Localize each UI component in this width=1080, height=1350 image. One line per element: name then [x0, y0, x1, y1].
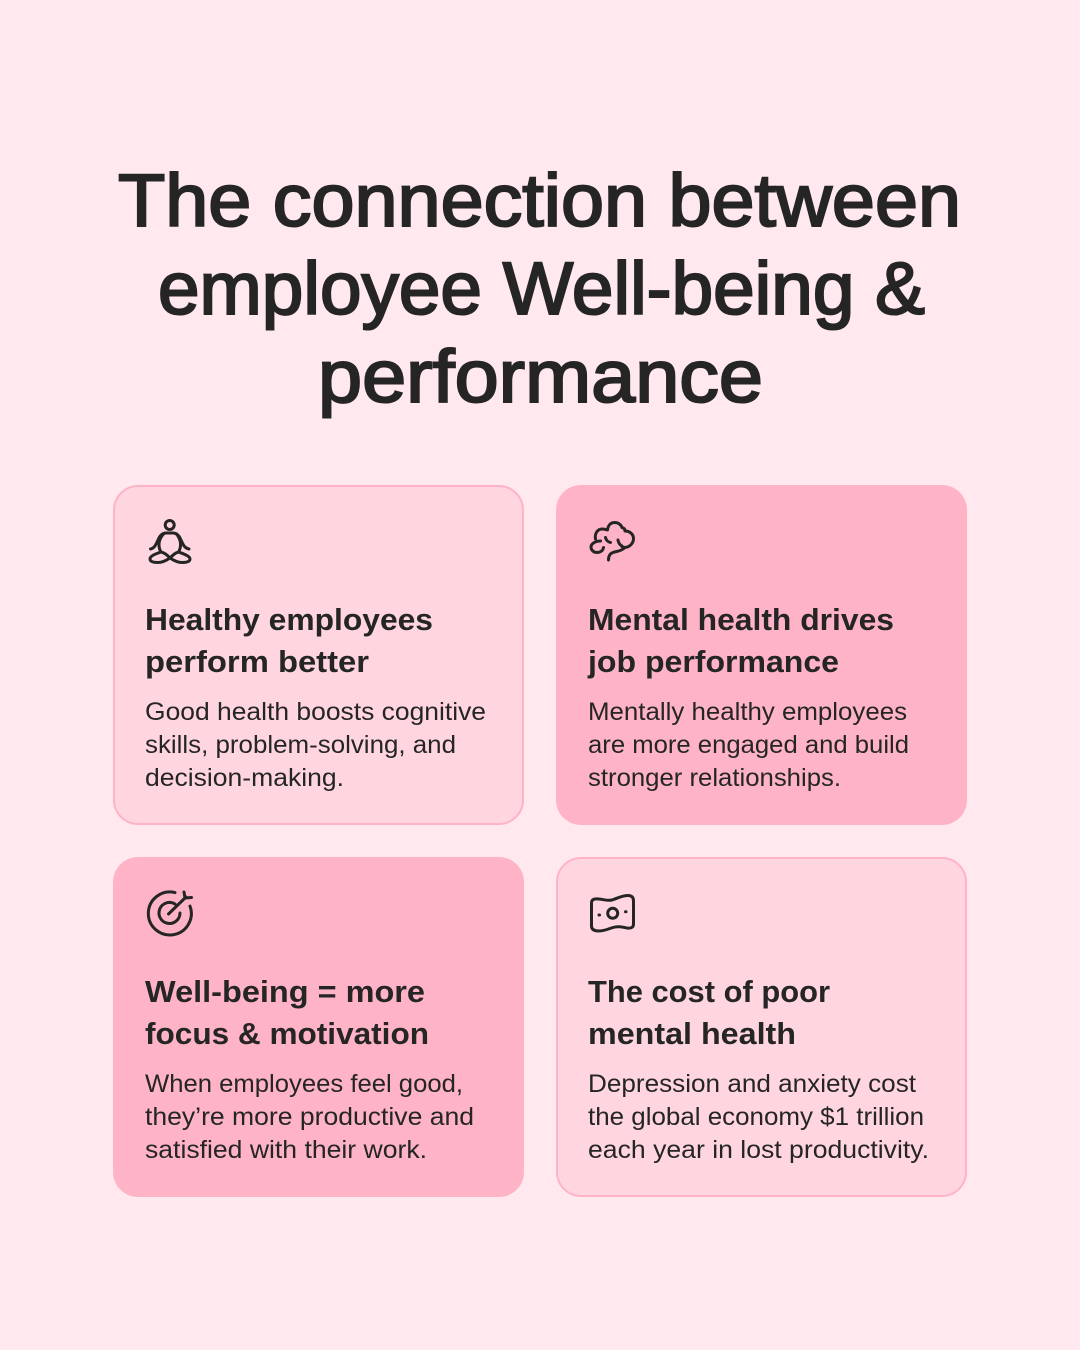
text: cost description: the global economy $1 trillion — [588, 1103, 924, 1131]
panel: healthy employees — [114, 486, 523, 824]
heading: mental health drives job performance: job performance — [587, 645, 839, 679]
text: cost description: each year in lost productivity. — [588, 1136, 929, 1164]
heading: well-being more focus and motivation: focus & motivation — [145, 1017, 429, 1051]
text: mental health description: Mentally healthy employees — [588, 698, 907, 726]
heading: healthy employees perform better: Healthy employees — [145, 603, 433, 637]
text: healthy employees description: skills, problem-solving, and — [145, 731, 456, 759]
text: cost description: Depression and anxiety cost — [588, 1070, 916, 1098]
text: mental health description — [588, 698, 909, 792]
heading: healthy employees perform better — [145, 603, 433, 679]
text: focus and motivation description: they’re more productive and — [145, 1103, 474, 1131]
title: The connection between — [118, 159, 961, 242]
icon: brain — [591, 522, 634, 560]
icon: banknote — [592, 896, 634, 931]
text: healthy employees description — [145, 698, 486, 792]
heading: the cost of poor mental health — [588, 975, 830, 1051]
title: performance — [318, 335, 763, 418]
text: focus and motivation description — [145, 1070, 474, 1164]
heading: mental health drives job performance: Mental health drives — [588, 603, 894, 637]
icon: meditating person — [150, 520, 190, 562]
title: employee Well-being & — [158, 247, 925, 330]
icon: target with arrow — [148, 892, 192, 935]
text: cost description — [588, 1070, 929, 1164]
text: focus and motivation description: satisfied with their work. — [145, 1136, 427, 1164]
panel: mental health — [556, 485, 967, 825]
text: healthy employees description: decision-making. — [145, 764, 344, 792]
text: healthy employees description: Good health boosts cognitive — [145, 698, 486, 726]
panel: focus and motivation — [113, 857, 524, 1197]
heading: the cost of poor mental health: mental health — [588, 1017, 796, 1051]
text: mental health description: are more engaged and build — [588, 731, 909, 759]
heading: well-being more focus and motivation: Well-being = more — [145, 975, 425, 1009]
text: mental health description: stronger relationships. — [588, 764, 841, 792]
heading: healthy employees perform better: perform better — [145, 645, 369, 679]
panel: cost of poor mental health — [557, 858, 966, 1196]
title — [118, 159, 961, 418]
heading: the cost of poor mental health: The cost of poor — [588, 975, 830, 1009]
heading: mental health drives job performance — [587, 603, 894, 679]
text: focus and motivation description: When employees feel good, — [145, 1070, 463, 1098]
heading: well-being more focus and motivation — [145, 975, 429, 1051]
